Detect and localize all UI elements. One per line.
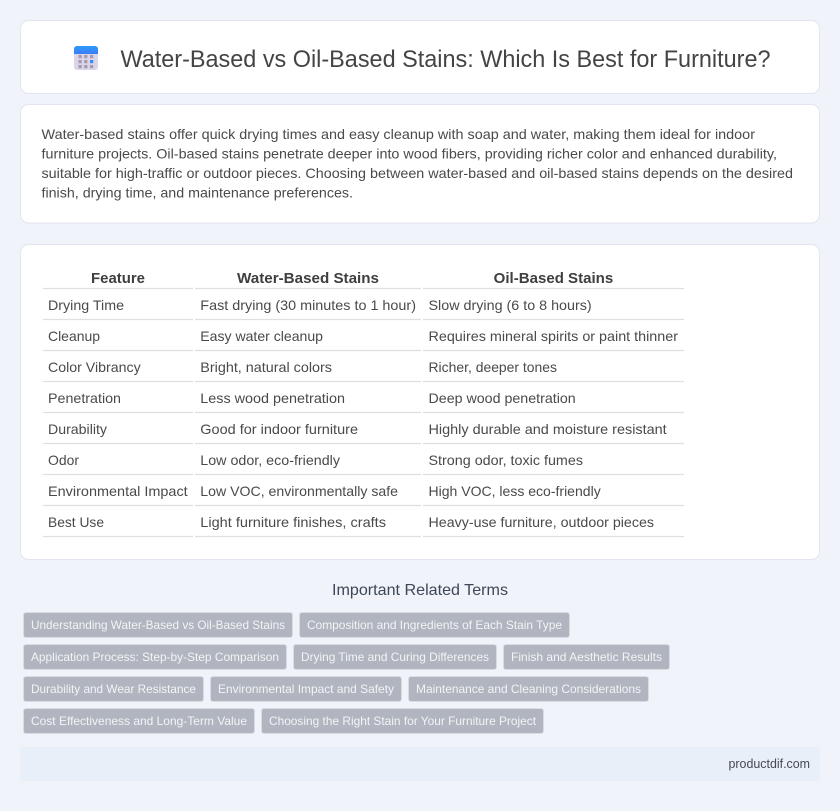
panel: introduction [20, 104, 820, 223]
table row: Environmental Impact [48, 483, 601, 499]
tag: Finish and Aesthetic Results [511, 650, 662, 664]
table row: Odor [48, 452, 583, 468]
table row: Drying Time: Fast drying (30 minutes to 1 hour) [200, 297, 416, 313]
table row: Environmental Impact: High VOC, less eco-friendly [428, 483, 601, 499]
table row: Cleanup: Requires mineral spirits or paint thinner [428, 328, 678, 344]
table row: Penetration [48, 390, 576, 406]
table row: Best Use: Best Use [48, 514, 104, 530]
tag: Environmental Impact and Safety [218, 682, 394, 696]
icon: calendar [74, 46, 98, 70]
heading: Important Related Terms: Important Related Terms [332, 582, 508, 599]
table row: Durability: Highly durable and moisture resistant [428, 421, 667, 437]
footer source text: productdif.com [728, 756, 810, 771]
tag [300, 612, 570, 638]
title: Water-Based vs Oil-Based Stains: Which Is Best for Furniture? [120, 46, 770, 73]
table row: Color Vibrancy: Richer, deeper tones [428, 359, 557, 375]
table header row [91, 270, 613, 287]
table row: Color Vibrancy: Bright, natural colors [200, 359, 332, 375]
related terms tags [24, 612, 670, 734]
tag [294, 644, 496, 670]
footer bar [20, 747, 820, 781]
table row: Drying Time: Slow drying (6 to 8 hours) [428, 297, 592, 313]
table row: Cleanup: Easy water cleanup [200, 328, 323, 344]
tag [24, 612, 292, 638]
tag [24, 676, 204, 702]
table row: Best Use [48, 514, 654, 530]
tag [262, 708, 544, 734]
tag: Choosing the Right Stain for Your Furniture Project [269, 714, 537, 728]
table row: Odor: Strong odor, toxic fumes [428, 452, 583, 468]
table row: Drying Time: Drying Time [48, 297, 124, 313]
table row: Environmental Impact: Environmental Impact [48, 483, 188, 499]
panel: comparison table [20, 244, 820, 560]
table row: Odor: Low odor, eco-friendly [200, 452, 340, 468]
table row: Drying Time [48, 297, 592, 313]
table row: Cleanup [48, 328, 678, 344]
table row: Environmental Impact: Low VOC, environmentally safe [200, 483, 398, 499]
table header row: Water-Based Stains [237, 270, 379, 287]
tag: Understanding Water-Based vs Oil-Based Stains [31, 618, 285, 632]
table row: Durability [48, 421, 667, 437]
tag [408, 676, 648, 702]
tag [504, 644, 670, 670]
tag [24, 708, 254, 734]
text block: introduction paragraph: furniture projects. Oil-based stains penetrate deeper into wood fibers, providing richer color and enhanced durability, [42, 146, 777, 162]
tag: Composition and Ingredients of Each Stain Type [307, 618, 562, 632]
text block: introduction paragraph: Water-based stains offer quick drying times and easy cleanup with soap and water, making them ideal for indoor [42, 126, 755, 142]
table row: Durability: Good for indoor furniture [200, 421, 358, 437]
table row: Durability: Durability [48, 421, 107, 437]
tag [24, 644, 286, 670]
table row: Odor: Odor [48, 452, 79, 468]
tag: Cost Effectiveness and Long-Term Value [31, 714, 247, 728]
table row: Best Use: Heavy-use furniture, outdoor pieces [428, 514, 654, 530]
table row: Penetration: Penetration [48, 390, 121, 406]
text block: introduction paragraph: finish, drying time, and maintenance preferences. [42, 184, 353, 200]
panel: title header [20, 20, 820, 94]
table row: Color Vibrancy [48, 359, 557, 375]
table row: Penetration: Less wood penetration [200, 390, 345, 406]
tag: Drying Time and Curing Differences [301, 650, 489, 664]
table row: Color Vibrancy: Color Vibrancy [48, 359, 141, 375]
table row: Cleanup: Cleanup [48, 328, 100, 344]
table header row: Oil-Based Stains [494, 270, 613, 287]
text block: introduction paragraph [42, 126, 793, 200]
tag: Application Process: Step-by-Step Comparison [31, 650, 279, 664]
table row: Penetration: Deep wood penetration [428, 390, 576, 406]
text block: introduction paragraph: suitable for high-traffic or outdoor pieces. Choosing between water-based and oil-based stains depends on the desired [42, 165, 793, 181]
table row: Best Use: Light furniture finishes, crafts [200, 514, 386, 530]
tag [210, 676, 402, 702]
tag: Maintenance and Cleaning Considerations [416, 682, 641, 696]
tag: Durability and Wear Resistance [31, 682, 196, 696]
table header row: Feature [91, 270, 145, 287]
